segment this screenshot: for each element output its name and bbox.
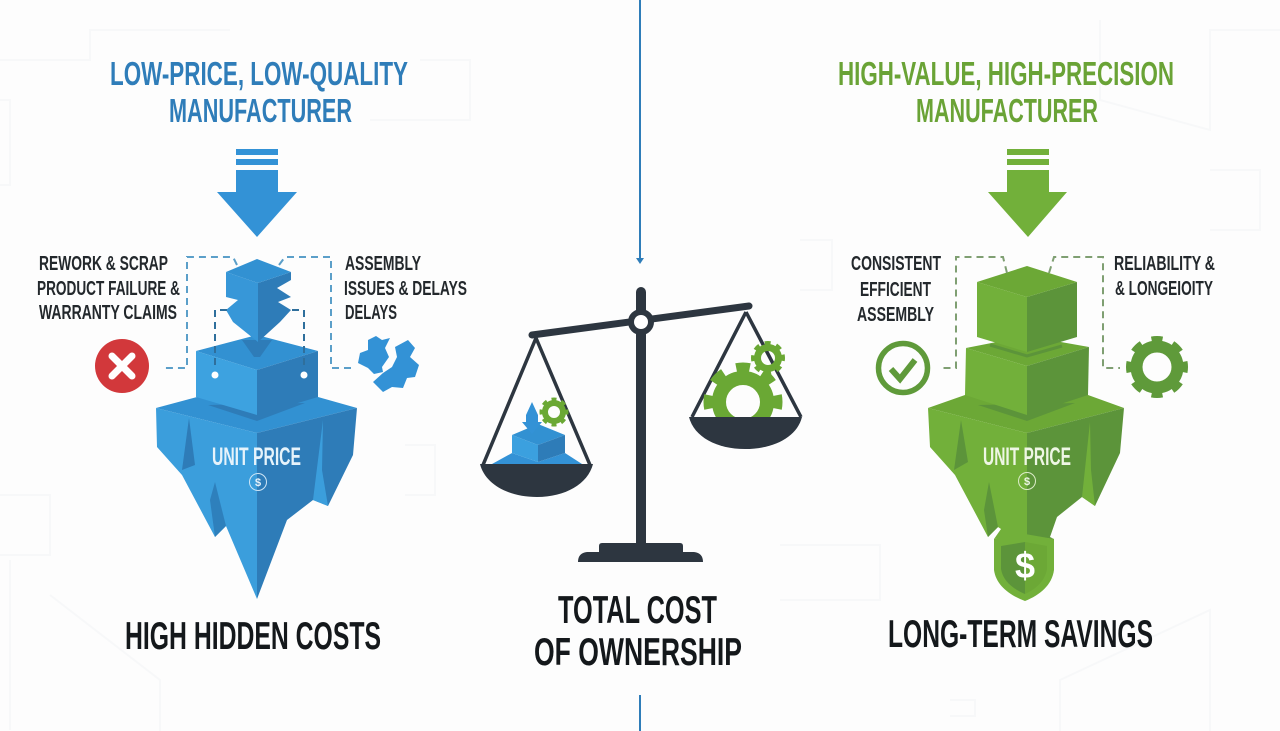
- right benefit labels: RELIABILITY &: [1114, 253, 1215, 275]
- center divider dot: [636, 258, 644, 264]
- icon: green check: [878, 344, 928, 392]
- left title: [110, 55, 408, 129]
- left cost labels: [37, 253, 180, 324]
- icon: dollar circle right: [1018, 472, 1036, 490]
- left benefit labels: [851, 253, 941, 326]
- small gear left pan: [542, 400, 566, 424]
- icon: dollar circle left: [250, 474, 266, 490]
- icon: dollar shield: [994, 534, 1054, 601]
- right benefit labels: [1114, 253, 1215, 300]
- center heading: OF OWNERSHIP: [534, 631, 742, 674]
- icon: red x: [95, 339, 149, 393]
- right benefit labels: & LONGEIOITY: [1115, 278, 1213, 300]
- left cost labels: REWORK & SCRAP: [39, 253, 168, 275]
- unit price label: right: UNIT PRICE: [983, 443, 1071, 471]
- right pan: [689, 417, 802, 449]
- icon: dollar shield: $: [1015, 545, 1035, 586]
- left benefit labels: CONSISTENT: [851, 253, 941, 275]
- iceberg stack: low quality: [156, 259, 357, 599]
- right cost labels: ASSEMBLY: [345, 253, 421, 275]
- scale strings: [483, 312, 801, 465]
- center heading: [534, 589, 742, 674]
- scale pivot: [631, 312, 651, 332]
- green stack: [928, 266, 1124, 539]
- right title: [838, 55, 1174, 129]
- blue mini stack in left pan: [492, 402, 582, 464]
- left panel: low-price manufacturer: [37, 55, 467, 658]
- left cost labels: PRODUCT FAILURE &: [37, 278, 180, 300]
- left benefit labels: ASSEMBLY: [857, 304, 934, 326]
- scale base: [578, 543, 703, 562]
- right cost labels: DELAYS: [345, 302, 397, 324]
- unit price label: left: UNIT PRICE: [212, 443, 301, 471]
- icon: green gear: [1130, 340, 1184, 394]
- left pan: [480, 464, 593, 497]
- dashed connectors: left stack: [161, 257, 353, 370]
- center divider line bottom: [639, 695, 641, 731]
- big gear right pan: [708, 367, 778, 437]
- dashed connectors: right stack: [940, 257, 1120, 368]
- right panel: high-value manufacturer: [838, 55, 1215, 656]
- left benefit labels: EFFICIENT: [860, 279, 931, 301]
- icon: broken gear: [358, 336, 419, 392]
- right title: MANUFACTURER: [916, 92, 1098, 129]
- left outcome heading: HIGH HIDDEN COSTS: [125, 615, 381, 658]
- center balance scale: [480, 292, 802, 562]
- icon: dollar circle left: $: [255, 477, 261, 489]
- scale post: [636, 292, 646, 550]
- center divider line top: [639, 0, 641, 258]
- left title: MANUFACTURER: [169, 92, 352, 129]
- left cost labels: WARRANTY CLAIMS: [39, 302, 177, 324]
- small gear right pan: [753, 343, 783, 373]
- scale beam: [532, 306, 749, 335]
- icon: green down arrow: [988, 149, 1067, 237]
- right cost labels: ISSUES & DELAYS: [344, 278, 467, 300]
- right cost labels: [344, 253, 467, 324]
- left title: LOW-PRICE, LOW-QUALITY: [110, 55, 408, 92]
- icon: blue down arrow: [217, 149, 297, 237]
- center heading: TOTAL COST: [558, 589, 717, 632]
- icon: dollar circle right: $: [1024, 476, 1030, 488]
